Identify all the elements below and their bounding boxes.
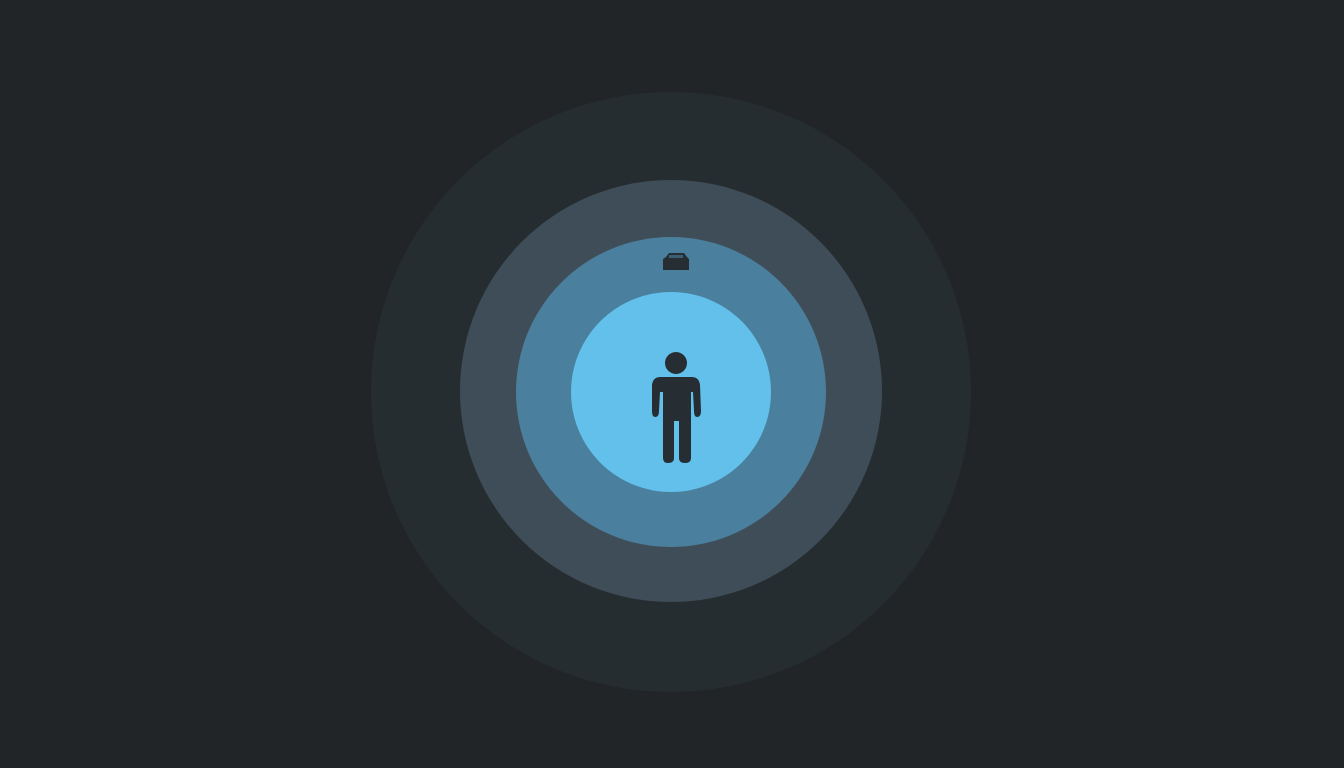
ring: third zone [516, 237, 826, 547]
ring: outer zone [371, 92, 971, 692]
ring: second zone [460, 180, 882, 602]
icon: person [652, 352, 701, 463]
icon: car [663, 253, 689, 270]
ring: inner zone [571, 292, 771, 492]
